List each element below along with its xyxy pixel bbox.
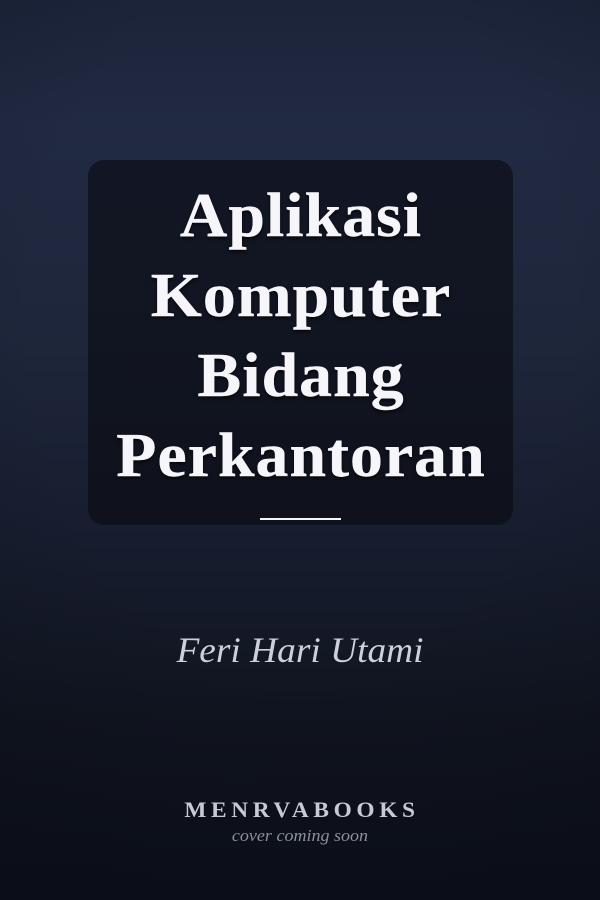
title: Komputer <box>150 262 451 330</box>
title: Perkantoran <box>116 422 485 490</box>
title underline rule <box>260 518 341 520</box>
author name: Feri Hari Utami <box>176 630 424 670</box>
title: Aplikasi <box>179 182 422 250</box>
title: Bidang <box>197 342 404 410</box>
publisher name: MENRVABOOKS <box>184 797 420 822</box>
title <box>116 182 485 490</box>
panel: title backdrop <box>88 160 513 525</box>
cover note: cover coming soon <box>232 826 368 845</box>
